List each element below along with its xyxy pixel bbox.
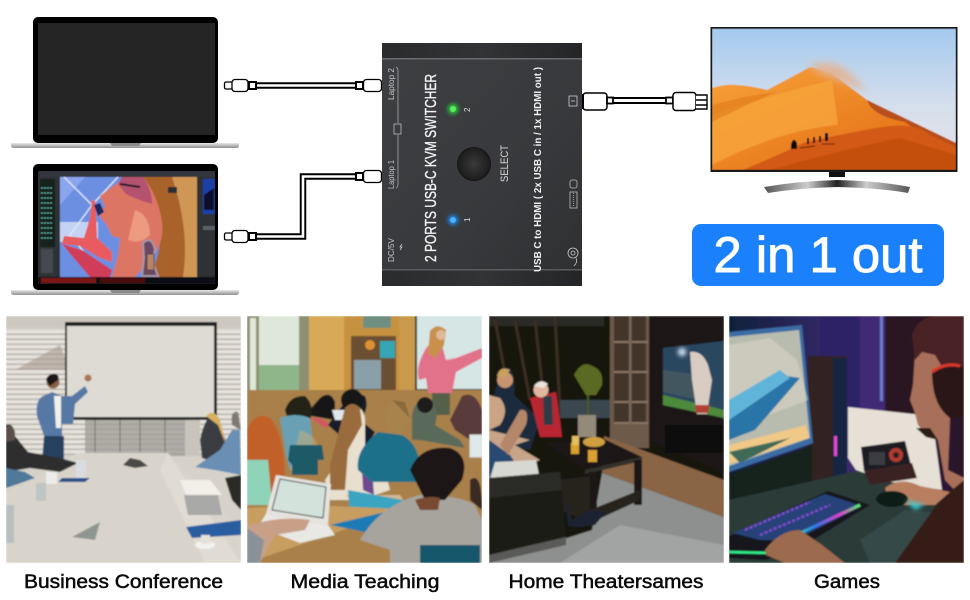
student hands at laptop	[247, 518, 310, 563]
hand	[62, 200, 112, 262]
viewers	[489, 368, 562, 482]
desk	[247, 506, 389, 558]
select label: SELECT	[499, 145, 511, 182]
red-haired student	[247, 416, 285, 500]
shelving unit	[610, 316, 649, 448]
icon: monitor out	[569, 96, 577, 106]
photo: media teaching	[247, 316, 482, 563]
hand on keyboard	[765, 530, 845, 563]
plant	[574, 364, 602, 437]
desk	[729, 470, 937, 563]
seated people right	[199, 418, 226, 460]
coffee table	[545, 436, 642, 523]
port labels	[386, 68, 396, 262]
KVM switcher box	[382, 43, 582, 286]
product title: 2 PORTS USB-C KVM SWITCHER	[423, 74, 440, 262]
presenter	[37, 374, 92, 462]
caption: Games: Games	[814, 571, 880, 593]
leather armchair	[489, 472, 566, 563]
teacher	[418, 326, 482, 415]
phone dock	[861, 441, 917, 485]
caption: Home Theatersames: Home Theatersames	[508, 571, 704, 593]
port labels: Laptop 2	[386, 68, 396, 100]
chair	[288, 445, 324, 475]
caption: Media Teaching: Media Teaching	[290, 571, 440, 593]
icon: power jack	[568, 248, 578, 266]
cable: laptop 1 to switcher	[224, 170, 382, 242]
TV stand	[829, 172, 845, 177]
photo: home theater	[489, 316, 724, 563]
rgb keyboard	[729, 491, 870, 560]
photo: business conference	[6, 316, 241, 563]
caption: Business Conference: Business Conference	[24, 571, 223, 593]
mouse	[876, 491, 908, 507]
LED 1 blue: 1	[463, 217, 472, 222]
plaid student	[412, 399, 465, 448]
seated people left	[6, 424, 78, 472]
pc tower	[808, 356, 847, 490]
laptop 2: blank screen	[11, 17, 239, 148]
grey sweater student	[360, 495, 482, 563]
port labels: DC/5V	[386, 238, 396, 262]
whiteboard	[415, 316, 482, 398]
foot	[565, 495, 606, 527]
cable: switcher to TV (HDMI)	[583, 92, 707, 110]
select knob	[457, 147, 491, 181]
gamer	[885, 316, 964, 563]
bright panel behind phone dock	[848, 407, 942, 490]
LED 2 green: 2	[463, 107, 472, 112]
table items	[123, 458, 148, 468]
icon: laptop port	[394, 124, 401, 134]
icon: USB and mouse ports	[570, 180, 577, 208]
photo: games	[729, 316, 964, 563]
laptop 1: photo editing screen	[11, 164, 239, 295]
TV with desert dune	[710, 27, 958, 193]
badge: 2 in 1 out: 2 in 1 out	[714, 227, 923, 283]
port bracket line	[396, 67, 398, 188]
hair	[142, 176, 186, 278]
blue hoodie student	[358, 432, 422, 482]
monitor	[729, 325, 813, 472]
conference table	[74, 452, 170, 457]
port labels: Laptop 1	[386, 160, 396, 189]
LED 1 blue	[448, 215, 472, 225]
cable: laptop 2 to switcher	[224, 80, 382, 92]
face	[97, 177, 163, 277]
earring	[142, 240, 158, 276]
dark tv wall	[649, 316, 724, 473]
floor and rug	[602, 436, 724, 517]
LED 2 green	[448, 104, 472, 114]
open laptop	[258, 475, 335, 543]
icon: lightning mark	[400, 244, 402, 250]
ponytail student	[325, 407, 390, 500]
students back row	[305, 395, 335, 420]
wall TV	[663, 341, 724, 418]
model description: USB C to HDMI ( 2x USB C in / 1x HDMI out )	[533, 67, 544, 272]
